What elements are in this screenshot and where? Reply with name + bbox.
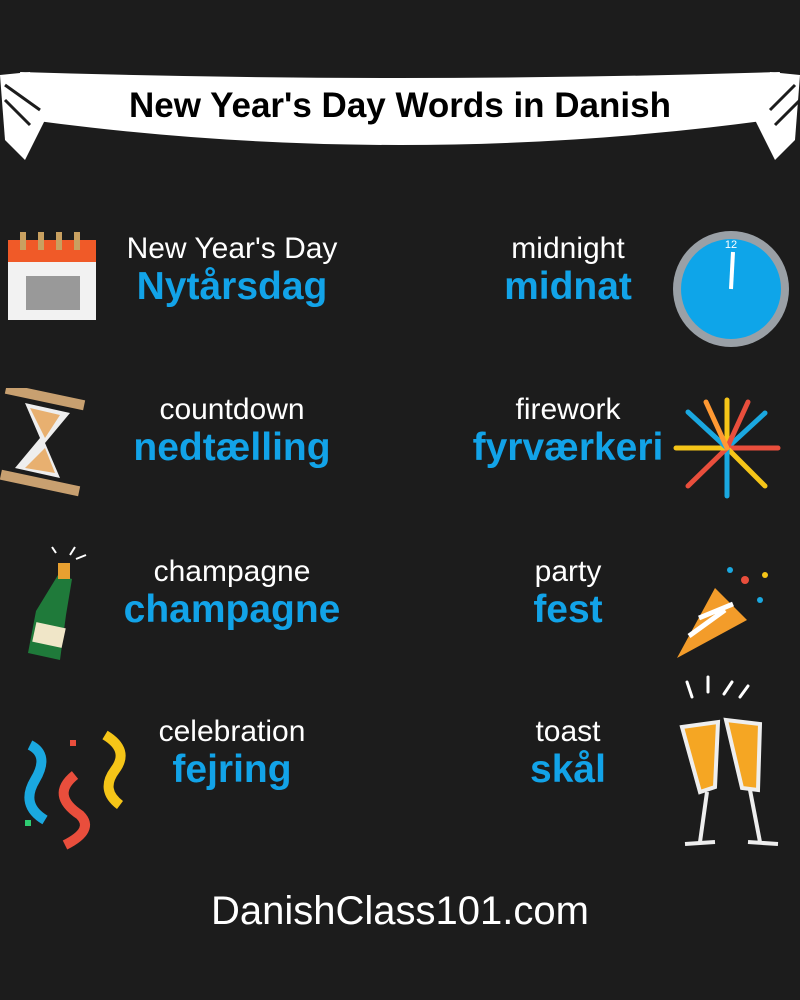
icon: toast glasses [680,676,778,846]
text: countdown [133,393,331,469]
text: champagne: champagne [124,588,340,631]
icon: hourglass [0,388,86,496]
icon: party popper [677,567,768,658]
text: toast: skål [530,748,606,791]
banner [0,72,800,160]
text: celebration: celebration [159,715,305,748]
text: firework: firework [515,393,620,426]
icon: confetti [24,730,126,850]
title: New Year's Day Words in Danish [129,86,671,125]
text: New Year's Day [127,232,338,308]
text: toast [530,715,606,791]
text: celebration [159,715,305,791]
text: celebration: fejring [172,748,292,791]
text: party [533,555,603,631]
text: New Year's Day: Nytårsdag [137,265,327,308]
text: firework [473,393,663,469]
icon: champagne bottle [28,546,86,660]
icon: clock: 12 [725,239,737,251]
icon: clock [673,231,789,347]
icon: calendar [8,232,96,320]
text: firework: fyrværkeri [473,426,663,469]
text: midnight: midnat [504,265,632,308]
icon: firework [674,398,780,498]
text: countdown: nedtælling [133,426,331,469]
text: champagne: champagne [154,555,310,588]
text: countdown: countdown [159,393,305,426]
text: champagne [124,555,340,631]
text: midnight: midnight [511,232,625,265]
text: party: party [535,555,601,588]
text: party: fest [533,588,603,631]
text: New Year's Day: New Year's Day [127,232,337,265]
text: midnight [504,232,632,308]
footer: DanishClass101.com [211,889,589,933]
text: toast: toast [535,715,601,748]
